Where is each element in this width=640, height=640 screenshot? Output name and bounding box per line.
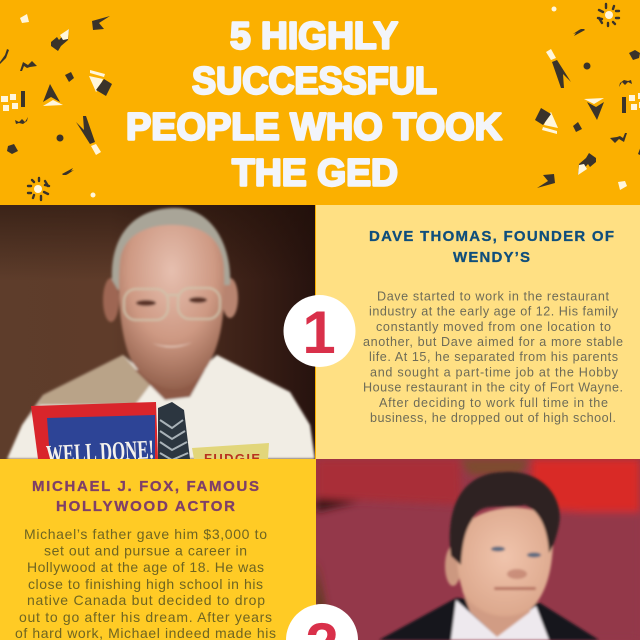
panel: Michael J. Fox photo [316, 459, 640, 640]
body text: another, but Dave aimed for a more stable [363, 335, 623, 349]
ear [445, 546, 461, 586]
body text: constantly moved from one location to [376, 320, 611, 334]
body text: close to finishing high school in his [28, 576, 263, 592]
neck [462, 590, 530, 637]
heading: HOLLYWOOD ACTOR [56, 498, 235, 515]
heading: MICHAEL J. FOX, FAMOUS [32, 478, 259, 495]
header band [0, 0, 640, 205]
panel: Dave Thomas text [316, 205, 640, 459]
title [126, 16, 503, 194]
number badge 2 [286, 604, 358, 640]
shirt [7, 355, 315, 459]
shirt collar [451, 600, 549, 640]
soup can: FUDGIE [204, 451, 260, 466]
right confetti icons [535, 4, 640, 190]
heading [369, 228, 614, 266]
eyes [491, 546, 541, 558]
heading: DAVE THOMAS, FOUNDER OF [369, 228, 614, 245]
hair [112, 208, 230, 290]
body text: life. At 15, he separated from his parents [369, 350, 618, 364]
title: THE GED [232, 152, 398, 194]
hair [450, 472, 560, 565]
body text: industry at the early age of 12. His family [369, 304, 619, 318]
panel: Dave Thomas photo [0, 205, 316, 470]
face [457, 508, 553, 617]
title: PEOPLE WHO TOOK [126, 106, 503, 148]
neck shadow [135, 370, 205, 400]
nose and mouth [494, 569, 536, 590]
title: SUCCESSFUL [192, 60, 437, 102]
body text: out to go after his dream. After years [19, 609, 272, 625]
tie [158, 402, 190, 460]
body text: Michael’s father gave him $3,000 to [24, 526, 267, 542]
body text: set out and pursue a career in [44, 542, 247, 558]
book: WELL DONE! [45, 434, 155, 470]
body text: Hollywood at the age of 18. He was [27, 559, 264, 575]
body text [15, 526, 276, 640]
book [31, 402, 158, 459]
glasses [124, 288, 220, 320]
ears [103, 278, 238, 322]
number badge 1: 1 [302, 299, 336, 366]
body text: native Canada but decided to drop [27, 592, 265, 608]
number badge 1 [284, 295, 356, 367]
body text: After deciding to work full time in the [379, 396, 608, 410]
suit [379, 598, 599, 640]
eyes and mouth [136, 297, 207, 347]
body text: Dave started to work in the restaurant [377, 290, 610, 304]
soup can [192, 443, 269, 459]
body text [363, 290, 623, 425]
body text: House restaurant in the city of Fort Wayne. [363, 380, 623, 394]
left confetti icons [0, 14, 112, 200]
body text: and sought a part-time job at the Hobby [370, 366, 619, 380]
body text: business, he dropped out of high school. [370, 411, 616, 425]
heading [32, 478, 259, 515]
panel: Michael J. Fox text [0, 459, 316, 640]
title: 5 HIGHLY [230, 16, 398, 58]
face [119, 225, 224, 389]
heading: WENDY’S [453, 249, 530, 266]
